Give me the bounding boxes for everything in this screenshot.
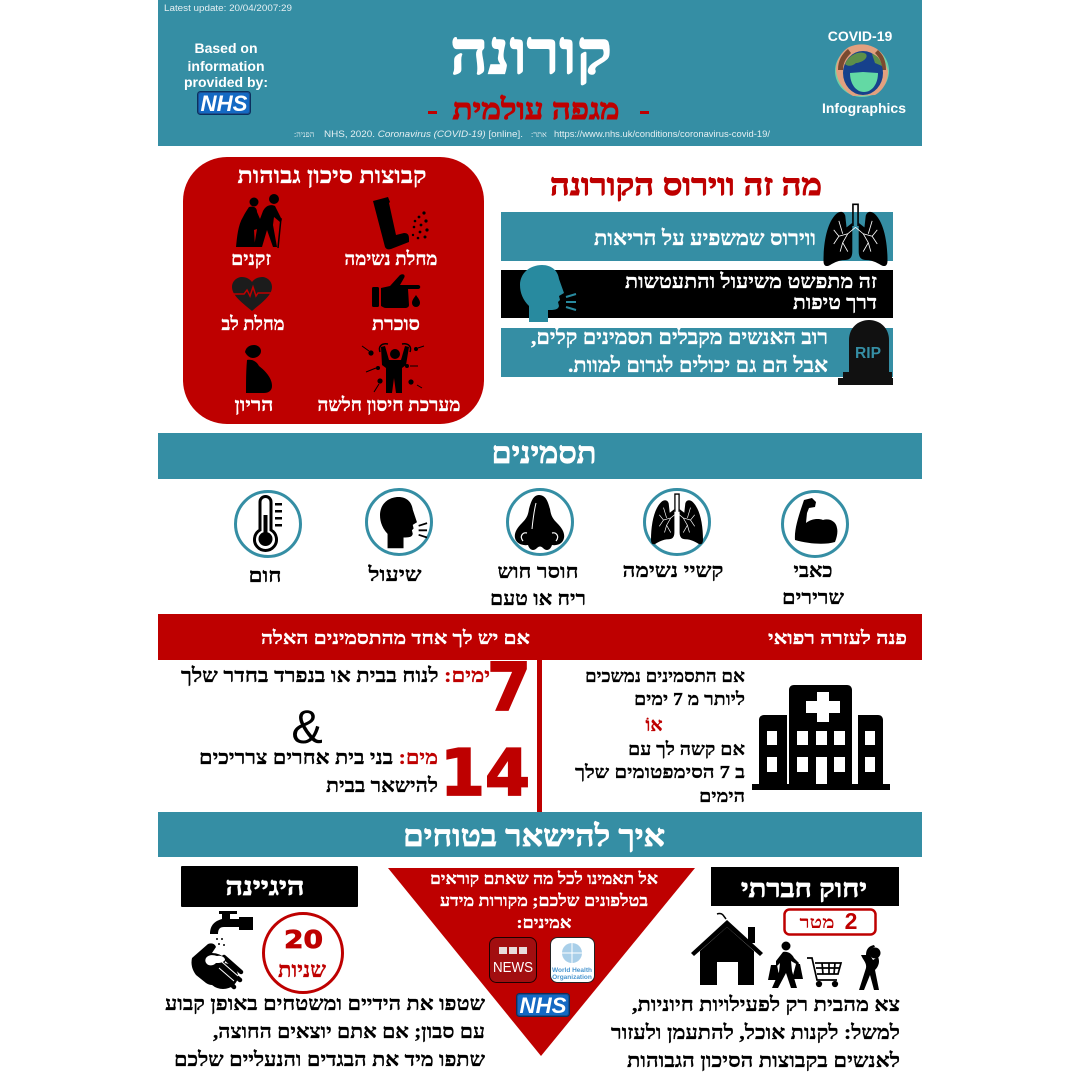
symptom: muscle ache: כאבי [794, 560, 832, 582]
icon: hospital [752, 685, 890, 790]
reference line [294, 129, 771, 139]
symptom: muscle ache: שרירים [782, 587, 844, 609]
text: שתפו מיד את הבגדים והנעליים שלכם [174, 1049, 485, 1071]
label: מחלת לב [222, 314, 284, 335]
icon: pointing finger with blood drop [372, 274, 420, 308]
divider [537, 660, 542, 812]
panel: fact 1 [501, 204, 893, 266]
symptom: loss of smell: חוסר חוש [498, 561, 578, 583]
icon: heart with pulse [232, 277, 272, 311]
panel: social distancing [611, 867, 900, 1072]
text: אל תאמינו לכל מה שאתם קוראים [430, 869, 658, 888]
panel: red advice band: פנה לעזרה רפואי [768, 628, 907, 649]
source credit [184, 40, 268, 90]
icon: World Health Organization: World Health [552, 967, 592, 974]
7 days text: ימים: לנוח בבית או בנפרד בחדר שלך [181, 665, 490, 687]
text: זה מתפשט משיעול והתעטשות [625, 271, 877, 293]
14 days text: מים: בני בית אחרים צרריכים [199, 747, 438, 769]
symptom: fever [236, 492, 300, 587]
icon: hand washing [192, 911, 253, 989]
label: מחלת נשימה [344, 249, 438, 270]
text: אוֹ [645, 715, 663, 736]
text: עם סבון; אם אתם יוצאים החוצה, [213, 1021, 485, 1043]
symptom: shortness of breath: קשיי נשימה [622, 560, 724, 582]
symptom: cough: שיעול [367, 564, 422, 586]
icon: globe with mask [835, 44, 889, 97]
icon: elderly couple [236, 194, 282, 248]
panel: red advice band: אם יש לך אחד מהתסמינים האלה [261, 628, 530, 649]
reference line: :הפניה [294, 130, 315, 139]
text: אם קשה לך עם [628, 739, 745, 759]
2 meter badge [784, 908, 876, 934]
text [611, 994, 900, 1072]
reference line: :אתר [531, 130, 547, 139]
panel: red advice band [158, 614, 922, 660]
icon: coughing head [380, 497, 427, 548]
icon: house [691, 914, 763, 985]
panel: fact 3 [501, 320, 893, 385]
panel: fact 2 [501, 265, 893, 322]
number 7: 7 [487, 649, 531, 726]
icon: BBC News [490, 938, 536, 982]
14 days text [199, 747, 438, 797]
heading box: היגיינה [226, 874, 304, 901]
text: לאנשים בקבוצות הסיכון הגבוהות [627, 1050, 900, 1072]
subtitle: מגפה עולמית [452, 94, 620, 126]
text: ליותר מ 7 ימים [634, 689, 745, 709]
text [165, 993, 485, 1071]
title: קורונה [450, 20, 612, 86]
icon: gravestone: RIP [855, 345, 881, 362]
symptom: muscle ache [782, 492, 848, 609]
2 meter badge: מטר [800, 913, 834, 932]
section band: staying safe: איך להישאר בטוחים [403, 820, 665, 853]
icon: pregnant woman [245, 345, 272, 393]
icon: lungs [651, 494, 703, 544]
text [430, 869, 658, 932]
icon: flexed arm [795, 498, 837, 544]
text: דרך טיפות [793, 292, 877, 314]
panel: high risk groups [183, 157, 484, 424]
20 seconds badge [264, 914, 342, 992]
text: ב 7 הסימפטומים שלך [575, 762, 745, 782]
heading: קבוצות סיכון גבוהות [238, 163, 426, 188]
source credit: Based on [194, 40, 258, 56]
ampersand: & [291, 700, 323, 753]
covid label: COVID-19 [828, 28, 892, 44]
label: זקנים [231, 249, 271, 270]
text: אם התסמינים נמשכים [585, 666, 745, 686]
2 meter badge: 2 [845, 908, 857, 934]
text [531, 325, 828, 377]
source credit: information [188, 58, 264, 74]
label: מערכת חיסון חלשה [318, 395, 460, 416]
symptom: fever: חום [248, 565, 282, 587]
text [625, 271, 877, 314]
text: צא מהבית רק לפעילויות חיוניות, [632, 994, 900, 1016]
symptom: cough [366, 490, 432, 586]
label: הריון [234, 395, 274, 416]
heading box [181, 866, 358, 907]
panel: header [158, 0, 922, 146]
source credit: provided by: [184, 74, 268, 90]
icon: shopper [768, 942, 803, 988]
panel: trusted sources [388, 868, 695, 1056]
NHS logo: NHS [200, 91, 248, 116]
label: סוכרת [372, 314, 420, 335]
section band: staying safe [158, 812, 922, 857]
number 14: 14 [440, 737, 530, 811]
text [575, 666, 745, 806]
symptom: loss of smell: ריח או טעם [490, 588, 586, 610]
panel: seek medical help [575, 666, 890, 806]
icon: exercising person [859, 945, 880, 990]
icon: weak immune system figure [362, 344, 424, 393]
20 seconds badge: 20 [284, 925, 323, 954]
heading box [711, 867, 899, 906]
NHS logo: NHS [520, 993, 567, 1018]
icon: lungs [824, 204, 888, 266]
reference line: NHS, 2020. Coronavirus (COVID-19) [online]. [324, 129, 523, 139]
icon: thermometer [254, 496, 282, 551]
text: אבל הם גם יכולים לגרום למוות. [568, 353, 828, 377]
icon: inhaler [373, 197, 429, 249]
text: למשל: לקנות אוכל, להתעמן ולעזור [611, 1022, 900, 1044]
last update text: Latest update: 20/04/2007:29 [164, 3, 292, 13]
panel: isolation advice [181, 649, 531, 811]
heading: what is coronavirus: מה זה ווירוס הקורונה [550, 169, 822, 202]
icon: shopping cart [807, 958, 841, 986]
icon: coughing head [520, 265, 576, 322]
infographics label: Infographics [822, 100, 906, 116]
section band: symptoms [158, 433, 922, 479]
symptom: loss of smell [490, 490, 586, 610]
text: ווירוס שמשפיע על הריאות [594, 226, 816, 250]
heading box: יחוק חברתי [741, 876, 867, 903]
text: הימים [699, 786, 745, 806]
text: בטלפונים שלכם; מקורות מידע [440, 891, 648, 910]
icon: gravestone [838, 320, 893, 385]
reference line: https://www.nhs.uk/conditions/coronavirus-covid-19/ [554, 129, 771, 139]
14 days text: להישאר בבית [326, 775, 438, 797]
panel: hygiene [165, 866, 485, 1071]
text: אמינים: [516, 913, 572, 932]
20 seconds badge: שניות [278, 957, 326, 982]
icon: nose [515, 495, 564, 550]
subtitle [428, 94, 649, 126]
icon: World Health Organization: Organization [552, 974, 592, 981]
text: רוב האנשים מקבלים תסמינים קלים, [531, 325, 828, 349]
symptom: shortness of breath [622, 490, 724, 582]
section band: symptoms: תסמינים [492, 437, 596, 470]
text: שטפו את הידיים ומשטחים באופן קבוע [165, 993, 485, 1015]
icon: BBC News: NEWS [493, 959, 533, 976]
icon: World Health Organization [550, 938, 594, 982]
